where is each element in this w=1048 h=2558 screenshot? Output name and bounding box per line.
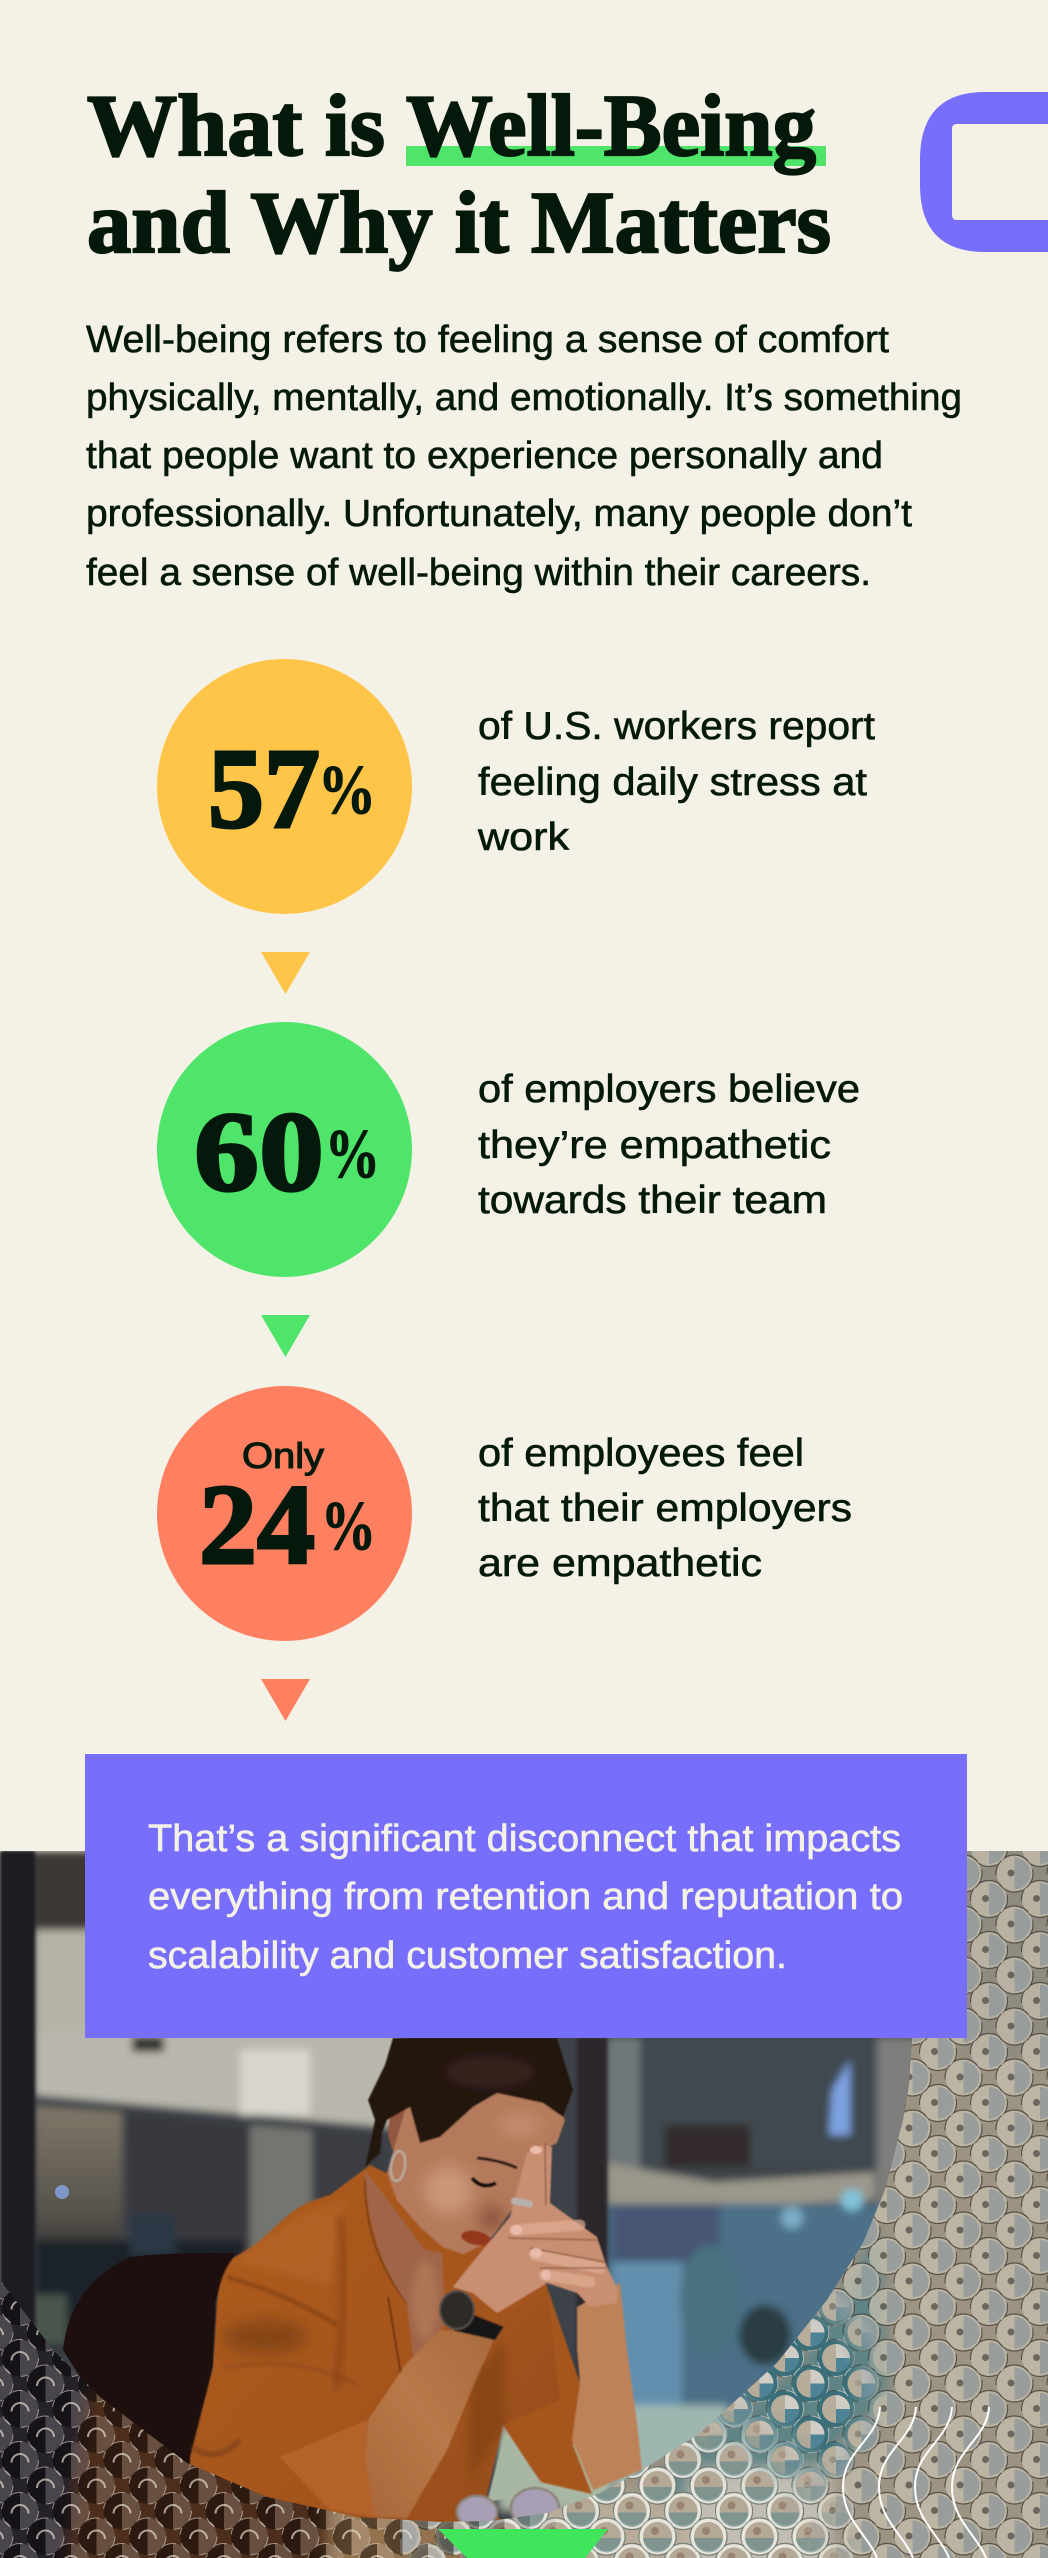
lens pattern bright — [416, 2391, 866, 2558]
stat description — [477, 705, 875, 859]
hair sheen — [445, 2056, 535, 2088]
intro paragraph: feel a sense of well-being within their careers. — [86, 552, 871, 594]
eyebrow — [477, 2158, 517, 2168]
textured glass overlay framing the photo — [0, 1830, 1048, 2558]
stat description: feeling daily stress at — [478, 761, 867, 804]
intro paragraph: professionally. Unfortunately, many people don’t — [86, 493, 912, 535]
stat description: of U.S. workers report — [478, 705, 875, 748]
face highlights — [424, 2113, 542, 2230]
stat description — [478, 1432, 852, 1585]
title line one: Well-Being — [406, 78, 816, 175]
title line one — [87, 78, 816, 175]
lens pattern tan — [400, 1851, 1048, 2558]
stat: 60 percent — [157, 1022, 860, 1277]
callout text: everything from retention and reputation to — [148, 1876, 903, 1918]
lens pattern dark and brown — [0, 2280, 565, 2558]
eyeglasses on desk — [457, 2488, 559, 2528]
stat description: work — [477, 816, 570, 859]
left pillar — [0, 1851, 35, 2331]
stat description: are empathetic — [478, 1542, 762, 1585]
percent sign: % — [318, 752, 376, 829]
photo: stressed woman at desk — [0, 1851, 912, 2522]
title — [87, 78, 831, 272]
shirt — [190, 2165, 560, 2558]
title highlight — [406, 146, 826, 166]
gap of desk behind arm — [487, 2432, 548, 2502]
clasped hands — [453, 2143, 618, 2313]
lips — [460, 2230, 492, 2246]
decorative purple rounded bracket — [920, 92, 1048, 252]
nails — [510, 2146, 551, 2280]
intro paragraph: that people want to experience personally and — [86, 435, 883, 477]
stat description: of employees feel — [478, 1432, 804, 1475]
green circle — [157, 1022, 412, 1277]
yellow circle — [157, 659, 412, 914]
closed eye lashes — [472, 2178, 496, 2186]
callout box — [85, 1754, 967, 2038]
bottom green arrow — [438, 2529, 608, 2558]
finger highlights — [516, 2225, 600, 2282]
stat description — [478, 1068, 860, 1222]
stat description: of employers believe — [478, 1068, 860, 1111]
texture base tones — [0, 1830, 1048, 2558]
forearm left — [365, 2330, 497, 2518]
title line two: and Why it Matters — [87, 175, 831, 272]
percent sign: % — [321, 1488, 376, 1565]
lens pattern teal — [680, 2291, 887, 2500]
intro paragraph: physically, mentally, and emotionally. It’s something — [86, 377, 962, 419]
blurred office background — [0, 1851, 912, 2520]
arrow: green — [261, 1315, 310, 1357]
arrow: orange — [261, 1679, 310, 1721]
hair — [365, 2038, 573, 2167]
stat: only 24 percent — [157, 1386, 852, 1641]
stat description: they’re empathetic — [478, 1124, 831, 1167]
percent sign: % — [325, 1116, 380, 1193]
forearm right — [572, 2283, 642, 2490]
number 57: 57 — [208, 725, 320, 852]
wrist watch — [440, 2291, 497, 2335]
neck and chest — [365, 2170, 445, 2357]
ear — [388, 2109, 406, 2152]
label only: Only — [242, 1435, 324, 1476]
intro paragraph: Well-being refers to feeling a sense of comfort — [86, 319, 889, 361]
intro paragraph — [86, 319, 962, 594]
right sleeve — [502, 2288, 593, 2495]
white wavy lines — [843, 2407, 989, 2558]
office chair — [63, 2253, 235, 2470]
callout text: That’s a significant disconnect that impacts — [148, 1818, 901, 1860]
callout text: scalability and customer satisfaction. — [148, 1935, 787, 1977]
woman figure — [190, 2038, 642, 2558]
distant blue light — [55, 2185, 69, 2199]
orange circle — [157, 1386, 412, 1641]
arrow: yellow — [261, 952, 310, 994]
title line one: What is — [87, 78, 385, 175]
stat description: towards their team — [478, 1179, 827, 1222]
ring — [510, 2197, 533, 2208]
centre window post — [577, 2038, 607, 2378]
face — [387, 2080, 565, 2254]
neck highlight — [412, 2260, 438, 2340]
number 24: 24 — [199, 1461, 315, 1588]
number 60: 60 — [194, 1088, 324, 1215]
callout text — [148, 1818, 903, 1977]
finger creases — [508, 2143, 606, 2268]
hoop earring — [389, 2150, 407, 2182]
shirt folds and shading — [192, 2180, 505, 2517]
stat: 57 percent — [157, 659, 875, 914]
stat description: that their employers — [478, 1487, 852, 1530]
